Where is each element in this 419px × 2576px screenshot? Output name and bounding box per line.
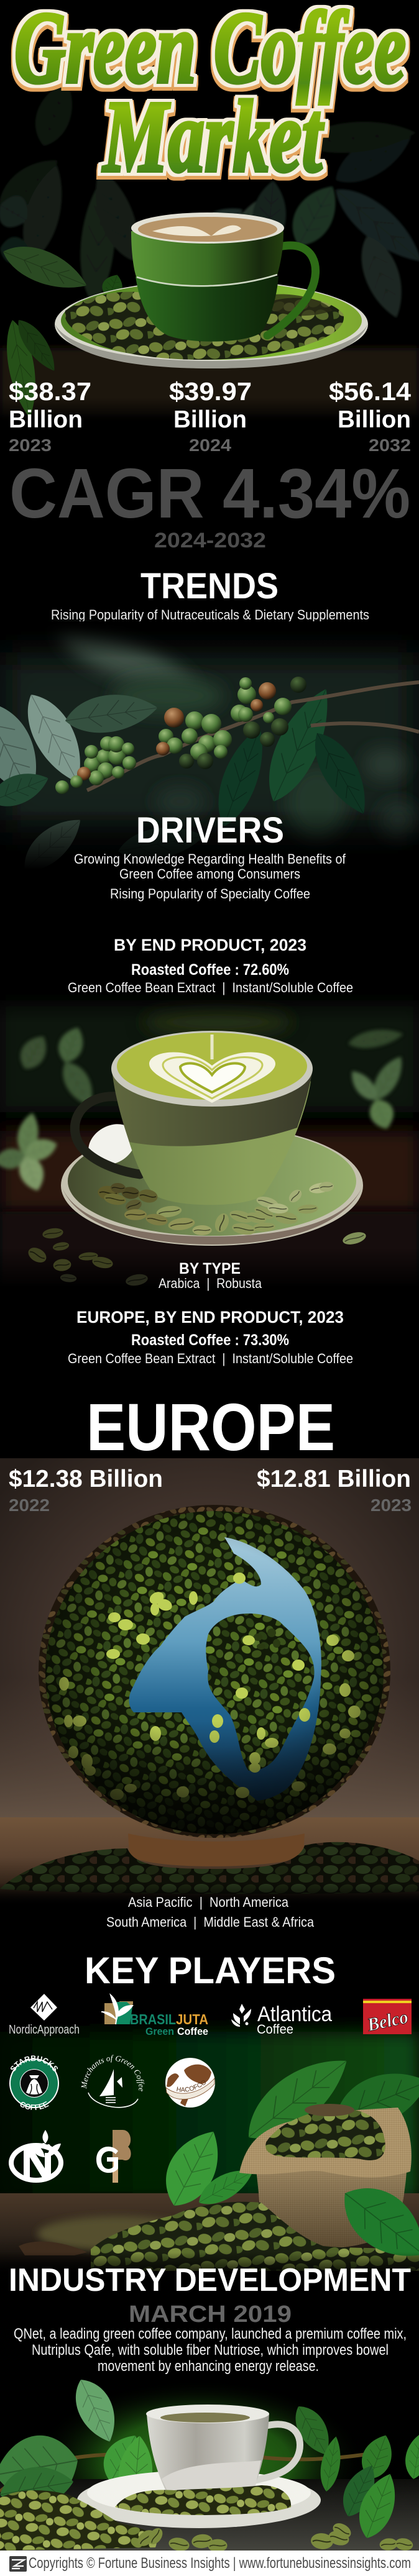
heading: industry development: INDUSTRY DEVELOPMENT xyxy=(9,2262,411,2298)
logo: Brasiljuta Green Coffee xyxy=(101,1995,208,2037)
stat: europe 2022: $12.38 Billion xyxy=(9,1466,163,1492)
ocean xyxy=(129,1537,321,1801)
front bean scatter xyxy=(0,2490,414,2552)
top fade xyxy=(0,621,419,659)
green backdrop xyxy=(0,2032,419,2199)
logo: Hacofco: HACOFCO xyxy=(177,2080,206,2092)
stat: europe 2022: 2022 xyxy=(9,1496,50,1515)
logo: Starbucks Coffee: STARBUCKS xyxy=(10,2055,58,2071)
globe scene xyxy=(0,1458,419,1906)
loose beans xyxy=(25,1227,367,1287)
blurred background xyxy=(0,628,419,839)
leaves xyxy=(153,2041,419,2257)
heading: europe by end product: EUROPE, BY END PRODUCT, 2023 xyxy=(76,1308,344,1327)
bottom fade xyxy=(0,808,419,870)
bean pile xyxy=(19,2202,419,2271)
type segments: Arabica | Robusta xyxy=(159,1276,262,1291)
table xyxy=(0,1817,419,1906)
saucer beans xyxy=(115,2485,291,2515)
CAGR period: 2024-2032 xyxy=(154,529,266,552)
stat: 2032 market size xyxy=(329,377,411,455)
green glow xyxy=(31,2380,367,2547)
africa and europe beans xyxy=(206,1614,315,1771)
closing scene: white cup with green leaves xyxy=(0,2372,419,2552)
drivers text: Rising Popularity of Specialty Coffee xyxy=(110,886,310,902)
heading: by end product: BY END PRODUCT, 2023 xyxy=(114,936,306,954)
island beans xyxy=(241,1628,280,1650)
stat: europe 2023 xyxy=(257,1466,412,1515)
end product segments: Green Coffee Bean Extract | Instant/Soluble Coffee xyxy=(68,980,353,995)
title xyxy=(14,0,406,193)
bright beans xyxy=(59,1573,361,1800)
logo: Brasiljuta Green Coffee: JUTA xyxy=(176,2011,208,2027)
stat: europe 2022 xyxy=(9,1466,163,1515)
title line 2: Market xyxy=(102,80,324,193)
heading: key players: KEY PLAYERS xyxy=(85,1950,336,1991)
saucer xyxy=(61,1116,363,1246)
europe roasted coffee share: Roasted Coffee : 73.30% xyxy=(131,1331,289,1349)
front leaves left xyxy=(0,236,126,420)
industry development text: movement by enhancing energy release. xyxy=(98,2358,319,2375)
other regions xyxy=(106,1894,315,1930)
logo: Merchants of Green Coffee xyxy=(81,2055,144,2108)
right leaves xyxy=(287,2400,419,2543)
drivers text: Green Coffee among Consumers xyxy=(119,866,300,882)
footer xyxy=(0,2551,419,2576)
wooden table xyxy=(0,348,419,418)
heading: drivers: DRIVERS xyxy=(136,810,284,851)
bottom fade xyxy=(0,1883,419,1906)
table xyxy=(0,2193,419,2277)
stat: 2024 market size: $39.97 xyxy=(169,377,252,406)
stat: 2023 market size xyxy=(9,377,91,455)
logo: Belco: Belco xyxy=(365,2007,410,2035)
green cup xyxy=(131,212,284,342)
footer logo xyxy=(9,2556,27,2572)
key players scene: sack of beans xyxy=(0,2032,419,2301)
stat: 2024 market size xyxy=(169,377,252,455)
saucer xyxy=(77,2470,321,2528)
cup handle xyxy=(267,245,316,336)
cup handle xyxy=(255,2424,300,2480)
logo: Starbucks Coffee xyxy=(9,2055,59,2110)
logo: Nordic Approach xyxy=(9,1994,80,2037)
stat: 2032 market size: Billion xyxy=(338,406,411,433)
logo: Brasiljuta Green Coffee: Coffee xyxy=(177,2026,208,2037)
leaves xyxy=(0,680,379,880)
logo: GB mark xyxy=(96,2130,131,2183)
saucer beans xyxy=(65,292,344,360)
heading: by type: BY TYPE xyxy=(179,1260,241,1277)
heading: trends: TRENDS xyxy=(140,566,279,606)
other regions: South America | Middle East & Africa xyxy=(106,1914,315,1930)
logo: Atlantica Coffee: Atlantica xyxy=(257,2003,332,2026)
logo: Brasiljuta Green Coffee: BRASIL xyxy=(130,2011,176,2027)
heading: europe: EUROPE xyxy=(86,1389,335,1464)
scattered beans xyxy=(0,1842,419,1894)
branch xyxy=(87,682,419,790)
stat: 2023 market size: $38.37 xyxy=(9,377,91,406)
drivers text xyxy=(74,851,346,902)
matcha latte scene xyxy=(0,979,419,1308)
industry development text xyxy=(14,2326,407,2375)
matcha cup xyxy=(111,1031,313,1205)
globe shading xyxy=(45,1511,384,1834)
logo: Atlantica Coffee xyxy=(231,2003,332,2037)
cup handle xyxy=(75,1097,140,1174)
stat: 2032 market size: $56.14 xyxy=(329,377,411,406)
logo: Merchants of Green Coffee: Merchants of Green Coffee xyxy=(81,2055,144,2091)
stat: europe 2023: 2023 xyxy=(371,1496,412,1515)
stem xyxy=(0,2454,367,2492)
left leaves xyxy=(0,2372,155,2513)
logo: Nordic Approach: NordicApproach xyxy=(9,2023,80,2037)
stat: 2024 market size: 2024 xyxy=(189,436,231,455)
date: MARCH 2019 xyxy=(129,2301,292,2327)
blurred plants background xyxy=(0,1000,419,1286)
table xyxy=(0,2479,419,2551)
coffee berries xyxy=(55,677,306,794)
logo: Starbucks Coffee: COFFEE xyxy=(20,2101,49,2110)
drivers text: Growing Knowledge Regarding Health Benefits of xyxy=(74,851,346,867)
logo: Brasiljuta Green Coffee: Green xyxy=(145,2026,174,2037)
other regions: Asia Pacific | North America xyxy=(128,1894,289,1910)
brown wall xyxy=(0,1458,419,1843)
top fade xyxy=(0,979,419,1022)
coffee branch scene xyxy=(0,621,419,887)
wooden stand xyxy=(128,1834,305,1866)
europe end product segments: Green Coffee Bean Extract | Instant/Soluble Coffee xyxy=(68,1351,353,1366)
bottom fade xyxy=(0,2252,419,2277)
bottom fade xyxy=(0,1249,419,1290)
burlap sack xyxy=(239,2104,412,2249)
stat: 2023 market size: Billion xyxy=(9,406,83,433)
logo: N leaf mark xyxy=(11,2130,61,2180)
bean globe xyxy=(39,1505,390,1838)
saucer beans xyxy=(97,1181,334,1236)
front leaf xyxy=(329,2171,419,2275)
trends text: Rising Popularity of Nutraceuticals & Dietary Supplements xyxy=(51,607,369,623)
stat: 2032 market size: 2032 xyxy=(369,436,411,455)
roasted coffee share: Roasted Coffee : 72.60% xyxy=(131,961,289,979)
stat: 2024 market size: Billion xyxy=(173,406,247,433)
logo: Hacofco xyxy=(165,2058,215,2108)
saucer xyxy=(55,280,368,368)
logo: Atlantica Coffee: Coffee xyxy=(257,2022,293,2037)
background foliage xyxy=(0,76,419,323)
hero scene: green coffee cup on saucer with leaves xyxy=(0,76,419,422)
white cup xyxy=(146,2405,269,2501)
blurred beans xyxy=(37,2216,199,2251)
stat: 2023 market size: 2023 xyxy=(9,436,52,455)
stat: europe 2023: $12.81 Billion xyxy=(257,1466,411,1492)
